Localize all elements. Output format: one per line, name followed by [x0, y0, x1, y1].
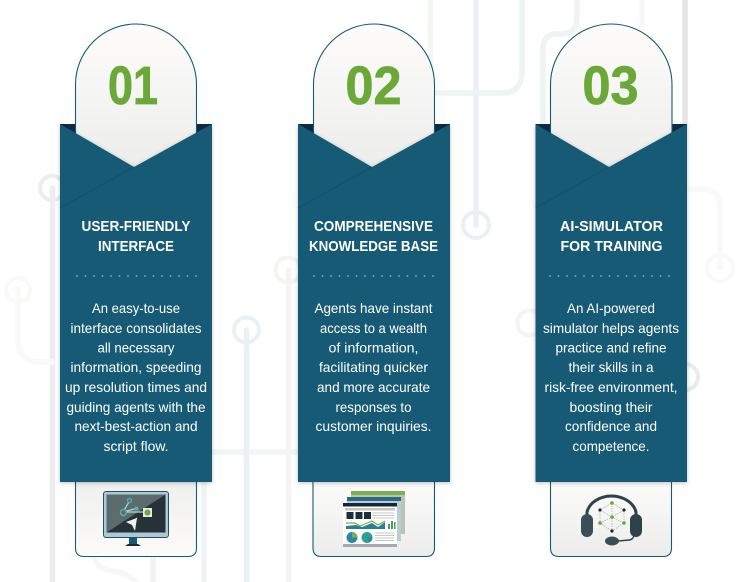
bottom icon tab 1	[76, 478, 196, 556]
body text 1	[65, 301, 207, 454]
heading 1: USER-FRIENDLY	[82, 218, 190, 235]
dark inside of envelope 3	[536, 124, 687, 140]
body text 2: customer inquiries.	[316, 419, 432, 434]
body text 2: access to a wealth	[320, 321, 427, 336]
number tab 2	[314, 24, 434, 172]
heading 1: INTERFACE	[98, 238, 174, 255]
body text 1: next-best-action and	[74, 419, 198, 434]
heading 1	[82, 218, 190, 255]
envelope fold 2	[298, 167, 372, 208]
body text 3: risk-free environment,	[544, 380, 678, 395]
body text 1: all necessary	[98, 340, 175, 356]
panel: 02 comprehensive knowledge base	[298, 24, 450, 556]
number tab 3	[550, 24, 672, 172]
body text 2: and more accurate	[317, 380, 430, 395]
dark inside of envelope 2	[298, 124, 450, 140]
icon: headset with network	[581, 496, 642, 546]
body text 3: An AI-powered	[567, 301, 655, 316]
body text 1: interface consolidates	[70, 321, 202, 336]
envelope fold 3	[536, 167, 609, 208]
body text 3: practice and refine	[556, 340, 667, 356]
number 03: 03	[582, 56, 638, 116]
number 01: 01	[108, 56, 158, 116]
body text 1: script flow.	[104, 439, 168, 454]
body text 2: Agents have instant	[314, 301, 433, 316]
envelope body 1	[60, 124, 212, 482]
heading 3	[560, 218, 663, 255]
body text 1: up resolution times and	[65, 380, 207, 395]
body text 3: their skills in a	[568, 360, 654, 375]
envelope body 3	[536, 124, 687, 482]
body text 1: information, speeding	[70, 360, 202, 375]
body text 2: of information,	[328, 340, 418, 356]
heading 2: KNOWLEDGE BASE	[309, 238, 438, 255]
heading 3: FOR TRAINING	[560, 238, 662, 255]
icon: dashboard windows	[343, 491, 405, 547]
panel: 01 user-friendly interface	[60, 24, 212, 556]
number tab 1	[76, 24, 196, 172]
body text 2: responses to	[336, 400, 412, 415]
envelope body 2	[298, 124, 450, 482]
body text 3: competence.	[572, 439, 650, 454]
bottom icon tab 3	[550, 478, 672, 556]
body text 1: An easy-to-use	[92, 301, 180, 316]
body text 3: simulator helps agents	[543, 321, 679, 336]
body text 2: facilitating quicker	[319, 360, 428, 375]
body text 3: boosting their	[570, 400, 653, 415]
heading 2: COMPREHENSIVE	[314, 218, 433, 235]
heading 2	[309, 218, 438, 255]
body text 3	[543, 301, 679, 454]
body text 3: confidence and	[565, 419, 657, 434]
number 02: 02	[346, 56, 402, 116]
body text 2	[314, 301, 433, 434]
dark inside of envelope 1	[60, 124, 212, 140]
heading 3: AI-SIMULATOR	[560, 218, 663, 235]
bottom icon tab 2	[313, 478, 434, 556]
panel: 03 AI-simulator for training	[536, 24, 687, 556]
icon: monitor with network nodes	[104, 492, 168, 546]
envelope fold 1	[60, 167, 134, 208]
body text 1: guiding agents with the	[66, 400, 206, 415]
